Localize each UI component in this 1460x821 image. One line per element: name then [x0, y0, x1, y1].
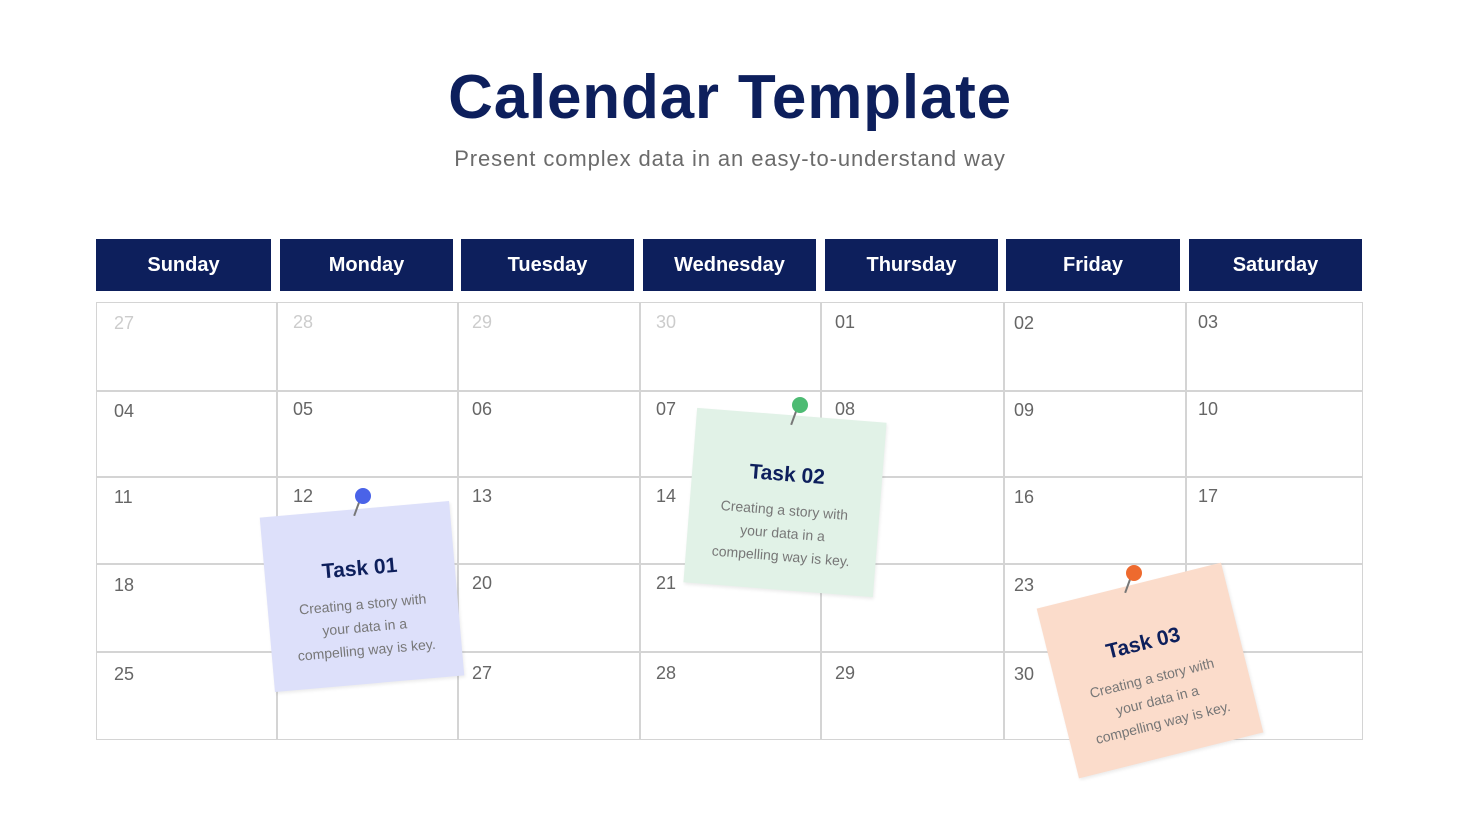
day numbers: 08	[835, 399, 855, 419]
day numbers: 28	[656, 663, 676, 683]
header: Thursday: Thursday	[866, 254, 957, 276]
task 02 text: Creating a story with	[720, 497, 849, 523]
task 03 text: your data in a	[1114, 682, 1200, 718]
header: Monday: Monday	[329, 254, 404, 276]
task 01 text	[297, 590, 436, 664]
day numbers: 04	[114, 401, 134, 421]
day numbers: 30	[1014, 664, 1034, 684]
day numbers: 27	[472, 663, 492, 683]
task 02 text: compelling way is key.	[711, 542, 850, 569]
pin: orange	[1124, 565, 1142, 593]
day numbers: 29	[835, 663, 855, 683]
task 02 heading: Task 02	[749, 460, 826, 489]
subtitle: Present complex data in an easy-to-understand way	[454, 146, 1006, 171]
task 01 text: your data in a	[322, 615, 408, 639]
day numbers: 06	[472, 399, 492, 419]
day numbers: 14	[656, 486, 676, 506]
calendar grid	[96, 302, 1363, 740]
header: Friday	[1006, 239, 1180, 291]
pin: green	[790, 397, 808, 425]
header: Thursday	[825, 239, 998, 291]
day numbers: 12	[293, 486, 313, 506]
header: Wednesday	[643, 239, 816, 291]
day numbers: 09	[1014, 400, 1034, 420]
header: Sunday	[96, 239, 271, 291]
title: Calendar Template	[448, 63, 1012, 132]
day numbers: 16	[1014, 487, 1034, 507]
task 02 text	[711, 497, 850, 569]
day numbers: 30	[656, 312, 676, 332]
sticky note: Task 01	[260, 501, 464, 692]
day numbers: 25	[114, 664, 134, 684]
header: Saturday	[1189, 239, 1362, 291]
day numbers: 05	[293, 399, 313, 419]
header: Tuesday: Tuesday	[508, 254, 587, 276]
task 01 heading: Task 01	[321, 554, 398, 583]
header: Wednesday: Wednesday	[674, 254, 785, 276]
day numbers: 07	[656, 399, 676, 419]
task 03 text: Creating a story with	[1088, 655, 1216, 701]
sticky note: Task 03	[1037, 563, 1263, 778]
header: Monday	[280, 239, 453, 291]
task 01 text: compelling way is key.	[297, 636, 436, 664]
day numbers: 23	[1014, 575, 1034, 595]
task 01 text: Creating a story with	[298, 590, 427, 618]
day numbers: 13	[472, 486, 492, 506]
day numbers: 27	[114, 313, 134, 333]
sticky note: Task 02	[683, 408, 887, 597]
day numbers: 20	[472, 573, 492, 593]
header: Sunday: Sunday	[147, 254, 220, 276]
day numbers: 18	[114, 575, 134, 595]
header: Tuesday	[461, 239, 634, 291]
task 03 text	[1088, 655, 1232, 747]
header: Saturday: Saturday	[1233, 254, 1318, 276]
day numbers: 03	[1198, 312, 1218, 332]
day numbers: 11	[114, 487, 133, 507]
header: Friday: Friday	[1063, 254, 1123, 276]
day numbers: 28	[293, 312, 313, 332]
day numbers: 17	[1198, 486, 1218, 506]
task 03 heading: Task 03	[1104, 623, 1183, 664]
day numbers: 10	[1198, 399, 1218, 419]
pin: blue	[353, 488, 371, 516]
day numbers: 21	[656, 573, 676, 593]
day numbers: 02	[1014, 313, 1034, 333]
day numbers: 29	[472, 312, 492, 332]
day numbers: 01	[835, 312, 855, 332]
task 02 text: your data in a	[740, 522, 826, 544]
task 03 text: compelling way is key.	[1094, 698, 1232, 747]
